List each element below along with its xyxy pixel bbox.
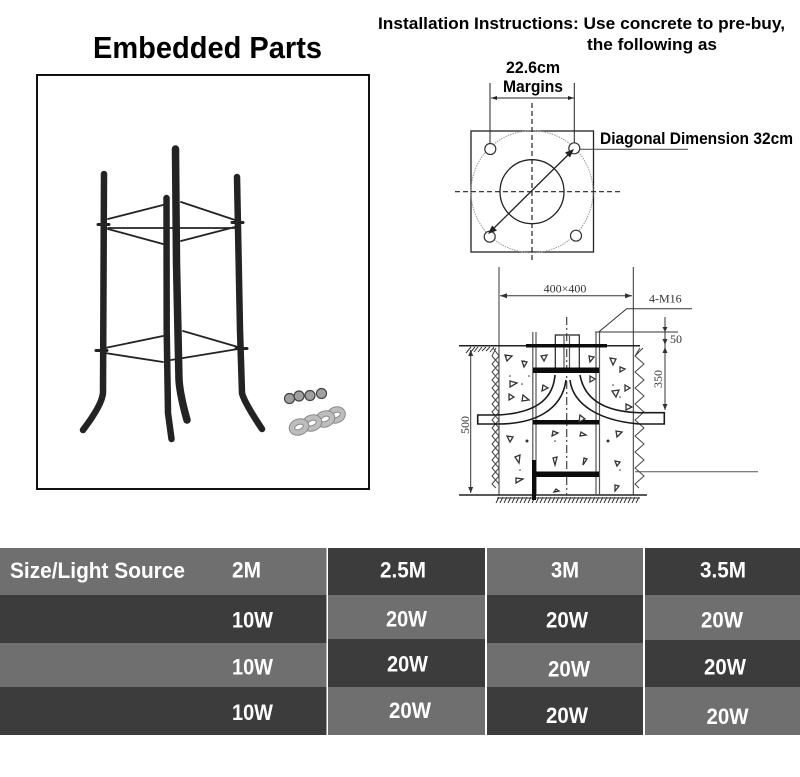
table column: 3M: 20W	[546, 703, 589, 728]
table column: 3M: 20W	[546, 608, 589, 633]
label: margins dimension	[503, 58, 563, 96]
conduits	[478, 375, 664, 424]
diagram: base plate plan	[455, 58, 793, 260]
table column: 2.5M: 20W	[386, 607, 428, 632]
icon: washers	[287, 404, 348, 438]
table column: 3M: 20W	[548, 657, 591, 682]
heading: installation instructions: the following as	[587, 35, 717, 54]
label: 500: 500	[458, 416, 472, 434]
heading: installation instructions: Installation Instructions: Use concrete to pre-buy,	[378, 14, 785, 33]
table column: size and 2M	[0, 548, 326, 735]
table column: 3.5M: 20W	[701, 608, 744, 633]
table column: 2.5M: 2.5M	[380, 558, 426, 583]
diagram: foundation section	[458, 267, 758, 503]
table column: size and 2M: Size/Light Source	[10, 558, 185, 583]
zigzag soil hatching	[492, 348, 644, 488]
label: 50: 50	[670, 332, 682, 346]
label: 350: 350	[651, 370, 665, 388]
title: Embedded Parts: Embedded Parts	[93, 30, 322, 65]
label: 400 x 400: 400×400	[544, 282, 586, 296]
label: margins dimension: Margins	[503, 77, 563, 96]
icon: steel anchor cage	[83, 149, 262, 439]
table column: 3.5M	[645, 548, 800, 735]
heading: installation instructions	[378, 14, 785, 54]
label: 4-M16: 4-M16	[649, 292, 682, 306]
label: margins dimension: 22.6cm	[506, 58, 560, 77]
table column: size and 2M: 10W	[232, 654, 274, 680]
table column: 3.5M: 3.5M	[700, 558, 746, 583]
table column: 3.5M: 20W	[706, 704, 749, 729]
panel: embedded parts photo	[37, 75, 369, 489]
anchor rods	[533, 317, 600, 495]
table column: 3M: 3M	[551, 558, 579, 583]
table column: size and 2M: 10W	[232, 608, 274, 633]
table column: size and 2M: 10W	[232, 700, 274, 725]
table column: 3M	[487, 548, 643, 735]
table column: 2.5M: 20W	[387, 652, 429, 677]
table column: 2.5M: 20W	[389, 698, 432, 723]
icon: nuts	[284, 388, 326, 404]
table column: 3.5M: 20W	[704, 654, 747, 680]
table column: 2.5M	[328, 548, 485, 735]
concrete specks	[505, 355, 632, 492]
table column: size and 2M: 2M	[232, 558, 261, 583]
steel plates and bars	[526, 344, 607, 500]
table: size and light source	[0, 548, 800, 735]
